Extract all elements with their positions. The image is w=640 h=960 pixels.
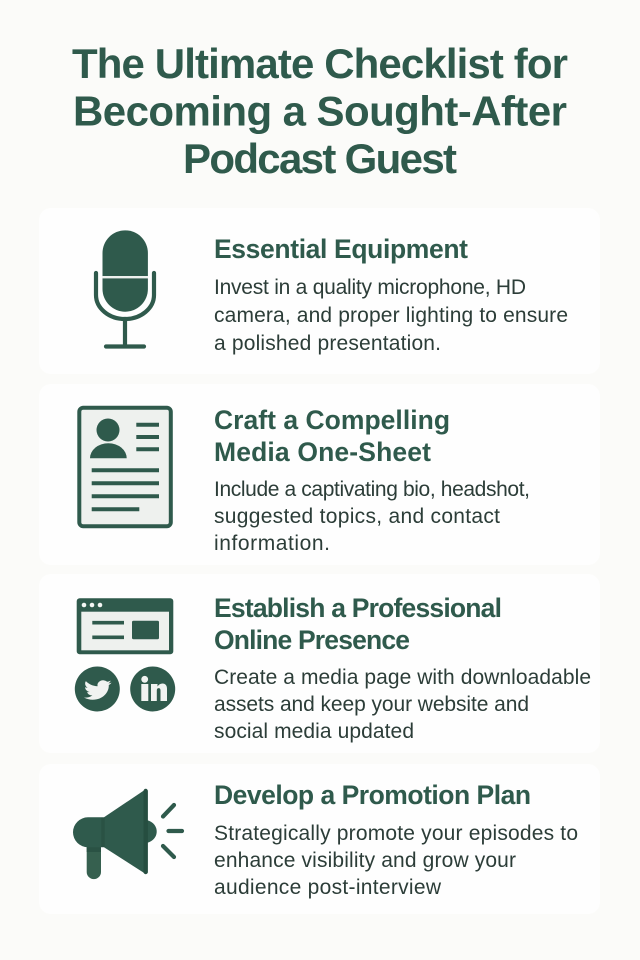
- text: essential equipment description: a polished presentation.: [214, 332, 441, 355]
- text: media one-sheet description: suggested topics, and contact: [214, 505, 500, 528]
- icon: twitter: [75, 666, 120, 712]
- text: essential equipment description: [214, 276, 568, 355]
- title: [72, 40, 568, 182]
- text: media one-sheet description: Include a captivating bio, headshot,: [214, 478, 530, 501]
- text: essential equipment description: camera, and proper lighting to ensure: [214, 304, 568, 327]
- panel: online presence: [39, 574, 600, 753]
- text: online presence description: social media updated: [214, 720, 414, 743]
- heading: essential equipment: Essential Equipment: [214, 234, 468, 264]
- panel: essential equipment: [39, 208, 600, 374]
- panel: promotion plan: [39, 764, 600, 914]
- title: Podcast Guest: [183, 135, 457, 182]
- text: promotion plan description: [214, 822, 578, 899]
- heading: media one-sheet: Craft a Compelling: [214, 405, 450, 435]
- text: media one-sheet description: information.: [214, 532, 330, 555]
- icon: linkedin: [130, 666, 175, 712]
- icon: one-sheet document: [79, 408, 171, 526]
- heading: media one-sheet: [214, 405, 450, 467]
- text: media one-sheet description: [214, 478, 530, 555]
- icon: browser window: [77, 598, 173, 654]
- text: essential equipment description: Invest in a quality microphone, HD: [214, 276, 526, 299]
- text: online presence description: assets and keep your website and: [214, 693, 529, 716]
- heading: online presence: [214, 593, 502, 655]
- icon: megaphone: [73, 789, 182, 879]
- title: Becoming a Sought-After: [73, 88, 567, 134]
- heading: online presence: Establish a Professional: [214, 593, 502, 623]
- heading: online presence: Online Presence: [214, 625, 410, 655]
- icon: microphone: [96, 230, 154, 346]
- heading: promotion plan: Develop a Promotion Plan: [214, 780, 531, 810]
- title: The Ultimate Checklist for: [72, 40, 568, 87]
- heading: media one-sheet: Media One-Sheet: [214, 437, 431, 467]
- panel: media one-sheet: [39, 384, 600, 565]
- text: promotion plan description: Strategically promote your episodes to: [214, 822, 578, 845]
- text: online presence description: Create a media page with downloadable: [214, 666, 591, 689]
- text: promotion plan description: audience post-interview: [214, 876, 442, 899]
- text: online presence description: [214, 666, 591, 743]
- text: promotion plan description: enhance visibility and grow your: [214, 849, 516, 872]
